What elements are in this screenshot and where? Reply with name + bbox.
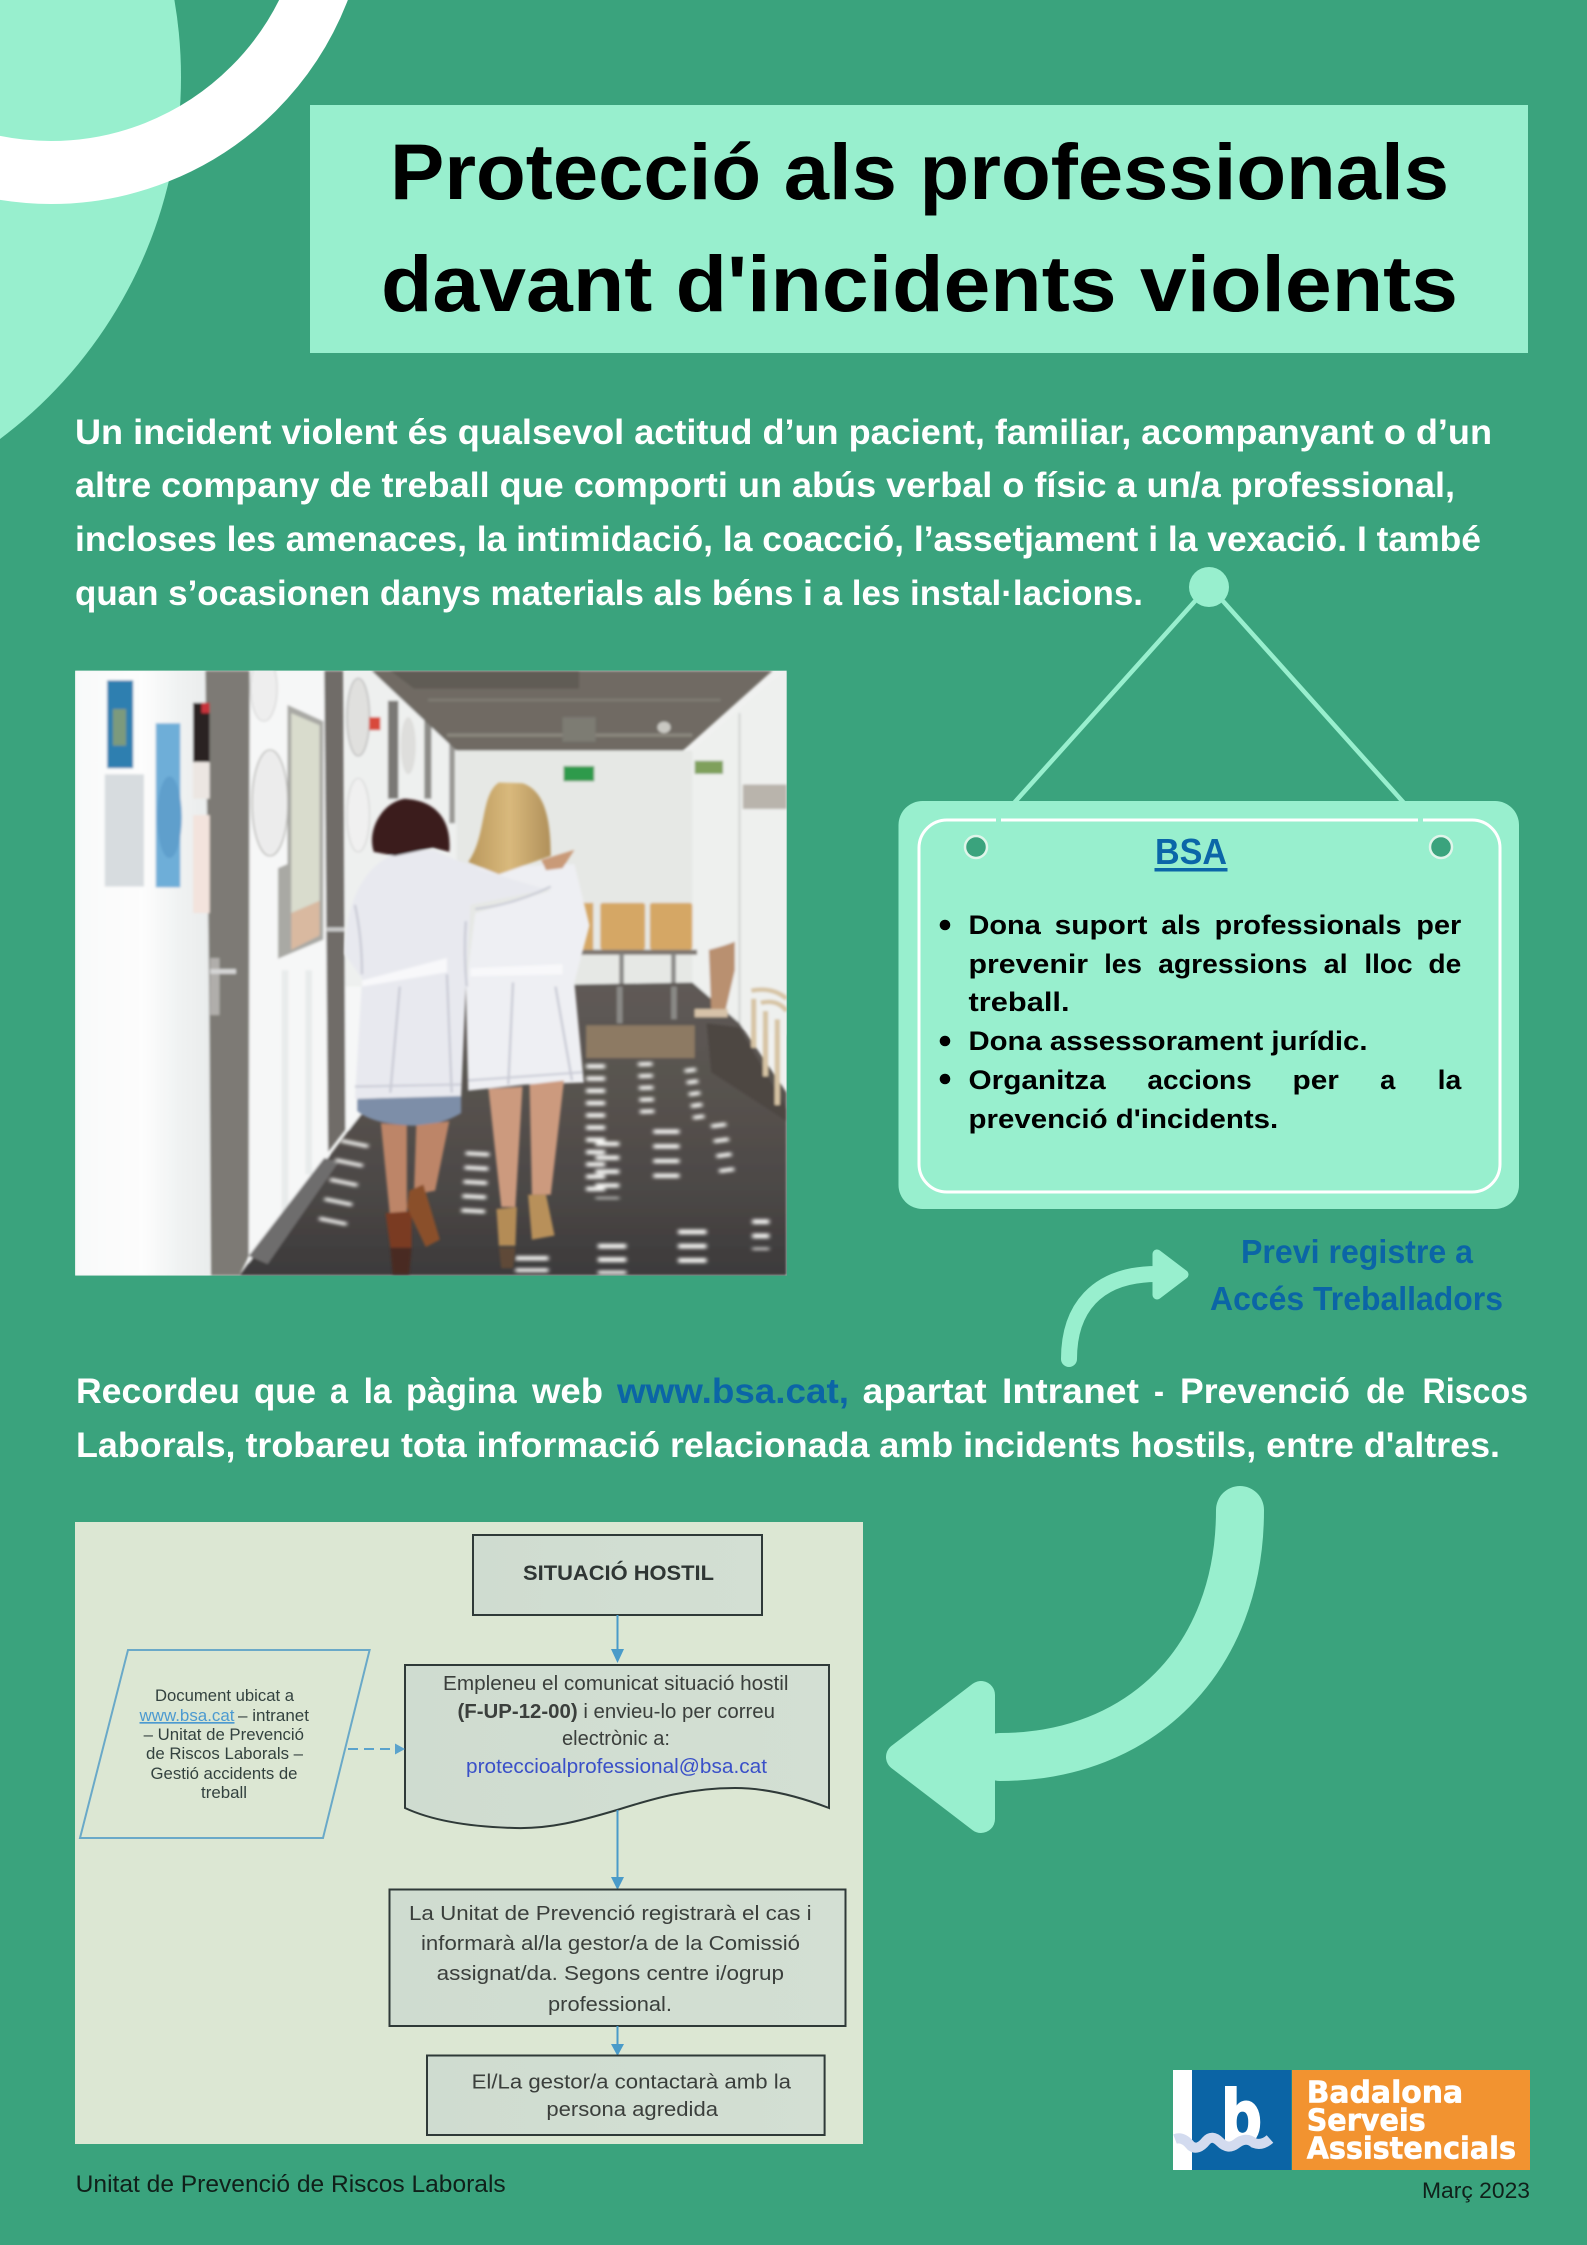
document box: fill in the form: (F-UP-12-00) i envieu-lo per correu	[458, 1701, 775, 1723]
web reference paragraph: de	[1366, 1372, 1405, 1411]
sign bullet list: Organitza	[968, 1065, 1107, 1095]
title banner: Protecció als professionals	[390, 127, 1449, 216]
box: manager contact: El/La gestor/a contactarà amb la	[472, 2072, 792, 2094]
sign bullet list: lloc	[1364, 949, 1413, 979]
document box: fill in the form: electrònic a:	[562, 1728, 670, 1750]
sign bullet list: de	[1428, 949, 1461, 979]
sign bullet list: professionals	[1215, 910, 1402, 940]
decorative mint circle	[0, 0, 181, 530]
web reference paragraph	[76, 1372, 1528, 1465]
web reference paragraph: www.bsa.cat,	[616, 1372, 849, 1411]
parallelogram: document location: treball	[201, 1784, 247, 1802]
arrow: dashed link to form	[348, 1744, 405, 1754]
arrow: to registration note	[1069, 1254, 1184, 1359]
decorative white ring	[0, 0, 338, 172]
hanging sign: nail and strings	[1014, 567, 1404, 803]
arrow: down to prevention unit	[611, 1810, 624, 1890]
sign bullet list: per	[1292, 1065, 1339, 1095]
web reference paragraph: apartat	[863, 1372, 987, 1411]
web reference paragraph: que	[254, 1372, 316, 1411]
panel: BSA sign	[898, 801, 1519, 1209]
logo: Badalona Serveis Assistencials: Serveis	[1307, 2104, 1426, 2139]
web reference paragraph: Laborals, trobareu tota informació relacionada amb incidents hostils, entre d'altres.	[76, 1426, 1500, 1465]
parallelogram: document location: – intranet	[238, 1707, 309, 1725]
document box: fill in the form: proteccioalprofessional@bsa.cat	[466, 1756, 767, 1778]
document box: fill in the form: Empleneu el comunicat situació hostil	[443, 1673, 788, 1695]
sign bullet list: als	[1161, 910, 1201, 940]
title banner	[310, 105, 1528, 353]
intro paragraph: altre company de treball que comporti un abús verbal o físic a un/a professional,	[75, 466, 1455, 505]
box: prevention unit: professional.	[548, 1994, 672, 2016]
intro paragraph: incloses les amenaces, la intimidació, la coacció, l’assetjament i la vexació. I també	[75, 520, 1481, 559]
box: hostile situation: SITUACIÓ HOSTIL	[523, 1561, 714, 1585]
sign bullet list: Dona	[968, 910, 1042, 940]
note: prior registration	[1210, 1233, 1503, 1317]
parallelogram: document location: Document ubicat a	[155, 1687, 295, 1705]
arrow: down to manager	[611, 2026, 624, 2056]
logo: Badalona Serveis Assistencials	[1173, 2070, 1530, 2170]
logo: Badalona Serveis Assistencials: Badalona	[1307, 2076, 1463, 2111]
web reference paragraph: -	[1154, 1372, 1164, 1411]
document box: fill in the form	[405, 1665, 829, 1828]
note: prior registration: Previ registre a	[1241, 1233, 1474, 1270]
web reference paragraph: web	[531, 1372, 603, 1411]
sign bullet list: prevenir	[968, 949, 1089, 979]
footer: unit name: Unitat de Prevenció de Riscos Laborals	[76, 2171, 506, 2198]
web reference paragraph: Recordeu	[76, 1372, 240, 1411]
web reference paragraph: pàgina	[406, 1372, 517, 1411]
box: hostile situation	[473, 1535, 762, 1615]
sign bullet list: les	[1104, 949, 1142, 979]
logo: Badalona Serveis Assistencials: b	[1221, 2075, 1262, 2159]
sign bullet list: prevenció d'incidents.	[968, 1104, 1278, 1134]
sign bullet list: Dona assessorament jurídic.	[968, 1026, 1368, 1056]
parallelogram: document location: www.bsa.cat	[138, 1707, 235, 1725]
web reference paragraph: a	[330, 1372, 348, 1411]
sign bullet list	[940, 910, 1462, 1134]
parallelogram: document location: – Unitat de Prevenció	[144, 1726, 304, 1744]
box: prevention unit: La Unitat de Prevenció registrarà el cas i	[409, 1903, 812, 1925]
parallelogram: document location: Gestió accidents de	[150, 1765, 298, 1783]
parallelogram: document location: de Riscos Laborals –	[146, 1745, 304, 1763]
title banner: davant d'incidents violents	[381, 239, 1458, 328]
box: manager contact	[427, 2056, 825, 2135]
box: manager contact: persona agredida	[546, 2099, 719, 2121]
intro paragraph	[75, 413, 1492, 613]
sign heading: BSA	[1155, 831, 1227, 872]
intro paragraph: quan s’ocasionen danys materials als béns i a les instal·lacions.	[75, 574, 1143, 613]
sign bullet list: suport	[1055, 910, 1147, 940]
sign bullet list: a	[1380, 1065, 1396, 1095]
web reference paragraph: Prevenció	[1180, 1372, 1350, 1411]
parallelogram: document location	[80, 1650, 370, 1838]
web reference paragraph: Riscos	[1422, 1372, 1528, 1411]
sign bullet list: la	[1438, 1065, 1462, 1095]
box: prevention unit	[390, 1890, 846, 2026]
logo: Badalona Serveis Assistencials: Assistencials	[1307, 2132, 1516, 2166]
box: prevention unit: informarà al/la gestor/a de la Comissió	[421, 1933, 800, 1955]
arrow: down to form step	[611, 1615, 624, 1663]
box: prevention unit: assignat/da. Segons centre i/ogrup	[437, 1963, 784, 1985]
footer: date: Març 2023	[1422, 2178, 1530, 2203]
sign bullet list: agressions	[1158, 949, 1307, 979]
sign bullet list: per	[1416, 910, 1462, 940]
web reference paragraph: la	[364, 1372, 392, 1411]
sign bullet list: accions	[1147, 1065, 1252, 1095]
note: prior registration: Accés Treballadors	[1210, 1280, 1503, 1317]
photo: two professionals walking in a hospital corridor	[75, 656, 787, 1276]
sign bullet list: al	[1324, 949, 1348, 979]
arrow: large curved pointing to flowchart	[900, 1510, 1240, 1819]
sign bullet list: treball.	[968, 987, 1070, 1017]
flowchart panel	[75, 1522, 863, 2144]
intro paragraph: Un incident violent és qualsevol actitud d’un pacient, familiar, acompanyant o d’un	[75, 413, 1492, 452]
web reference paragraph: Intranet	[1002, 1372, 1139, 1411]
